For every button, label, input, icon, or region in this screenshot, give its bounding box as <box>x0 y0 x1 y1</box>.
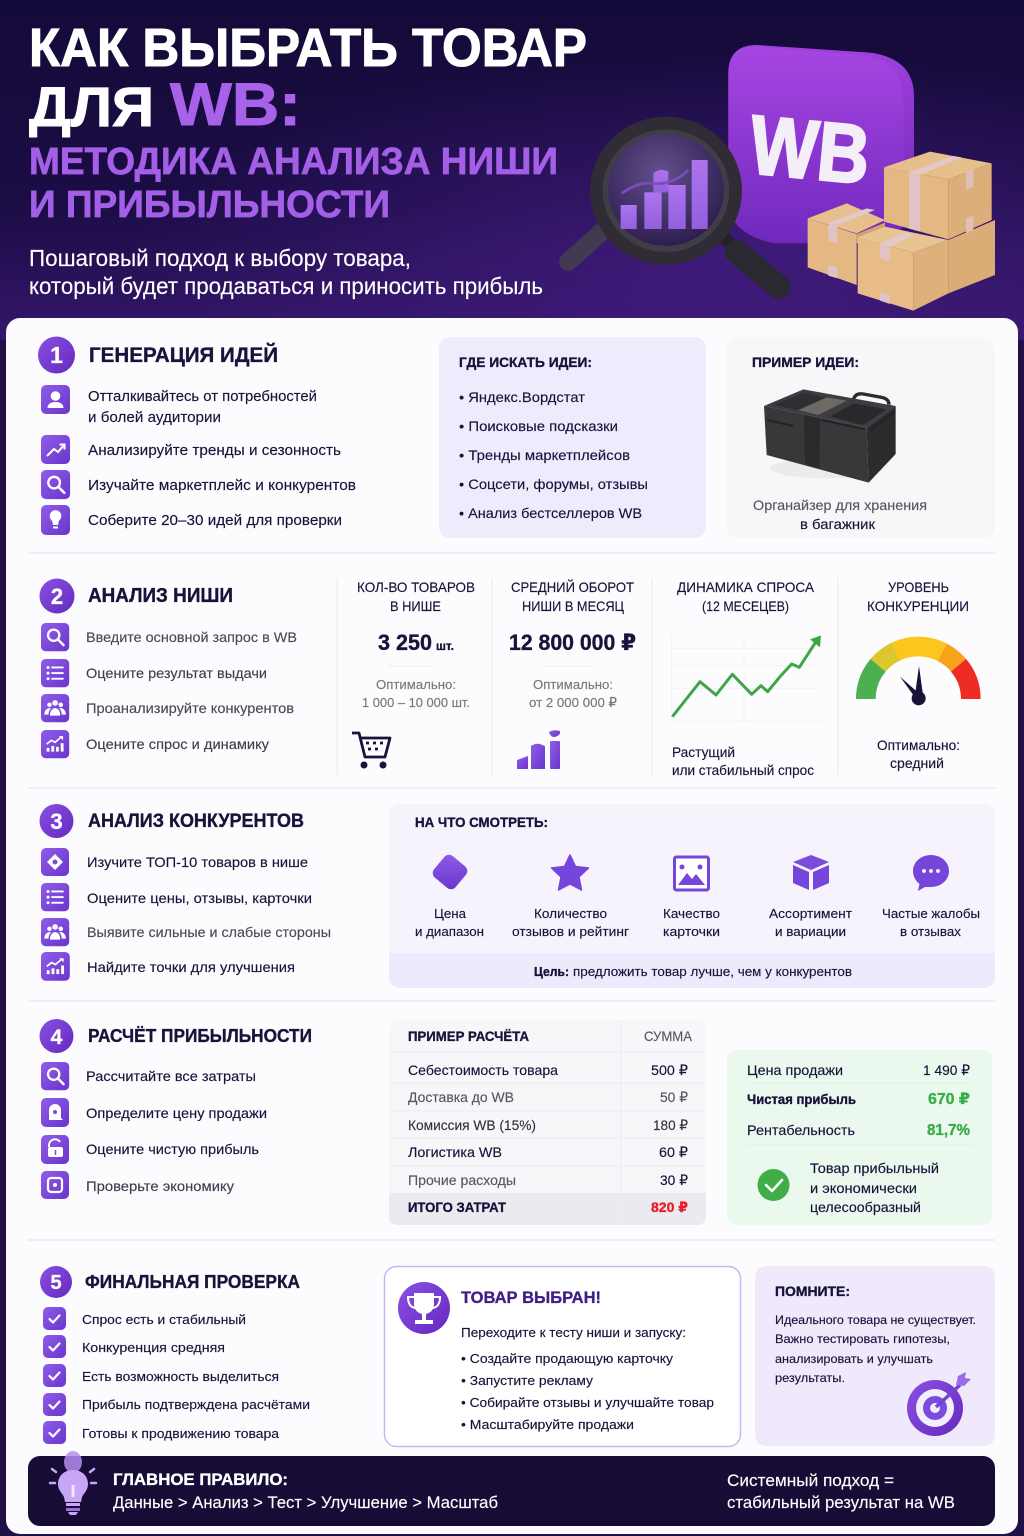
panel: where to look for ideas: ГДЕ ИСКАТЬ ИДЕИ: <box>459 354 592 370</box>
panel: where to look for ideas: • Яндекс.Вордстат <box>459 389 586 405</box>
subtitle: Пошаговый подход к выбору товара, <box>29 245 411 271</box>
chart: competition level gauge: Оптимально: <box>877 737 960 753</box>
panel: where to look for ideas: • Поисковые подсказки <box>459 418 618 434</box>
table: example calculation: Прочие расходы <box>408 1172 516 1188</box>
item: assortment: и вариации <box>775 924 846 939</box>
panel: idea example: Органайзер для хранения <box>753 497 927 513</box>
icon: green check <box>758 1169 790 1201</box>
metric: number of products: 1 000 – 10 000 шт. <box>362 695 470 710</box>
step: net profit <box>41 1135 259 1164</box>
metric: monthly turnover: СРЕДНИЙ ОБОРОТ <box>511 578 634 595</box>
section 3: competitor analysis <box>40 804 995 988</box>
step: evaluate results <box>41 659 267 687</box>
panel: profit summary: Товар прибыльный <box>810 1160 939 1176</box>
step: calculate costs <box>41 1062 256 1090</box>
step: evaluate results: Оцените результат выдачи <box>86 665 267 681</box>
step: top 10 products: Изучите ТОП-10 товаров в нише <box>87 854 308 870</box>
chart: demand dynamics over 12 months: (12 МЕСЕЦЕВ) <box>702 598 789 614</box>
step: collect ideas <box>41 505 342 535</box>
icon: shopping cart <box>352 733 390 768</box>
chart: demand dynamics over 12 months: Растущий <box>672 744 735 760</box>
check: differentiation: Есть возможность выделиться <box>82 1369 279 1384</box>
step: sale price: Определите цену продажи <box>86 1105 267 1121</box>
hero illustration: WB tile, magnifier and boxes <box>568 45 995 311</box>
heading: idea generation: ГЕНЕРАЦИЯ ИДЕЙ <box>89 343 278 367</box>
item: complaints <box>882 855 980 939</box>
panel: idea example: в багажник <box>800 516 876 532</box>
table: example calculation: Доставка до WB <box>408 1089 514 1105</box>
step: trends: Анализируйте тренды и сезонность <box>88 442 341 459</box>
heading: competitor analysis: АНАЛИЗ КОНКУРЕНТОВ <box>88 811 304 832</box>
number badge 4: 4 <box>51 1026 63 1049</box>
banner: main rule: Системный подход = <box>727 1471 894 1490</box>
panel: product selected: • Создайте продающую карточку <box>461 1351 674 1366</box>
item: complaints: Частые жалобы <box>882 906 980 921</box>
metric: monthly turnover <box>509 578 636 769</box>
metric: number of products <box>352 579 475 768</box>
icon: magnifier <box>568 117 778 287</box>
title <box>29 18 587 226</box>
step: top 10 products <box>41 848 308 876</box>
panel: remember: ПОМНИТЕ: <box>775 1283 850 1299</box>
section 5: final check <box>40 1266 995 1446</box>
item: assortment: Ассортимент <box>769 906 852 921</box>
section 1: idea generation <box>38 336 995 538</box>
step: audience needs: и болей аудитории <box>88 409 221 426</box>
number badge 3 <box>40 804 74 838</box>
chart: competition level gauge: средний <box>890 755 944 771</box>
check: differentiation <box>43 1364 279 1387</box>
panel: profit summary: Цена продажи <box>747 1062 843 1078</box>
panel: profit summary: целесообразный <box>810 1199 921 1215</box>
item: assortment <box>769 855 852 939</box>
icon: WB tile <box>728 45 914 243</box>
callout: goal: предложить товар лучше, чем у конкурентов <box>573 964 852 979</box>
section 4: profitability calculation <box>40 1019 992 1225</box>
step: audience needs: Отталкивайтесь от потребностей <box>88 388 317 405</box>
panel: remember: анализировать и улучшать <box>775 1352 933 1366</box>
check: profit: Прибыль подтверждена расчётами <box>82 1397 310 1412</box>
title: И ПРИБЫЛЬНОСТИ <box>29 184 390 226</box>
icon: WB tile: WB <box>746 98 874 202</box>
panel: where to look for ideas: • Анализ бестселлеров WB <box>459 505 642 521</box>
step: points of improvement: Найдите точки для улучшения <box>87 959 295 975</box>
item: card quality <box>663 857 720 939</box>
panel: profit summary: Рентабельность <box>747 1122 855 1138</box>
icon: growing bars <box>517 730 560 769</box>
check: competition: Конкуренция средняя <box>82 1340 225 1355</box>
chart: demand dynamics over 12 months: ДИНАМИКА СПРОСА <box>677 579 815 595</box>
item: reviews and rating: Количество <box>534 906 607 921</box>
step: points of improvement <box>41 952 295 981</box>
panel: profit summary: 670 ₽ <box>928 1091 970 1108</box>
heading: niche analysis: АНАЛИЗ НИШИ <box>88 585 233 607</box>
number badge 5 <box>40 1266 72 1298</box>
table: example calculation: 60 ₽ <box>659 1144 688 1160</box>
number badge 1 <box>38 336 75 374</box>
title: КАК ВЫБРАТЬ ТОВАР <box>29 18 587 78</box>
table: example calculation: Логистика WB <box>408 1144 502 1160</box>
chart: competition level gauge: УРОВЕНЬ <box>888 579 949 595</box>
panel: where to look for ideas <box>439 337 706 538</box>
banner: main rule: ГЛАВНОЕ ПРАВИЛО: <box>113 1470 288 1489</box>
panel: product selected: • Запустите рекламу <box>461 1373 594 1388</box>
panel: profit summary: Чистая прибыль <box>747 1091 856 1107</box>
metric: number of products: В НИШЕ <box>390 598 441 614</box>
table: example calculation: СУММА <box>644 1028 693 1044</box>
check: demand <box>43 1307 246 1330</box>
step: trends <box>41 435 341 464</box>
table: example calculation: 500 ₽ <box>651 1062 688 1078</box>
metric: monthly turnover: НИШИ В МЕСЯЦ <box>522 598 625 614</box>
chart: demand dynamics over 12 months <box>668 579 825 778</box>
step: net profit: Оцените чистую прибыль <box>86 1141 259 1157</box>
panel: profit summary: и экономически <box>810 1180 917 1196</box>
table: example calculation: 820 ₽ <box>651 1199 688 1215</box>
table: example calculation: ИТОГО ЗАТРАТ <box>408 1199 506 1215</box>
icon: cardboard boxes <box>808 152 995 311</box>
panel: remember: Важно тестировать гипотезы, <box>775 1332 950 1346</box>
item: card quality: Качество <box>663 906 720 921</box>
step: analyse competitors: Проанализируйте конкурентов <box>86 700 294 716</box>
step: demand dynamics <box>41 730 269 758</box>
step: strengths and weaknesses <box>41 918 331 946</box>
icon: light bulb <box>50 1451 96 1515</box>
chart: competition level gauge <box>856 579 981 771</box>
metric: monthly turnover: 12 800 000 ₽ <box>509 630 636 655</box>
panel: profit summary: 81,7% <box>927 1122 970 1139</box>
metric: number of products: шт. <box>436 639 454 653</box>
panel: what to look at <box>389 804 995 988</box>
step: prices, reviews, cards <box>41 883 312 911</box>
item: reviews and rating: отзывов и рейтинг <box>512 924 629 939</box>
step: strengths and weaknesses: Выявите сильные и слабые стороны <box>87 924 331 940</box>
icon: trunk organizer <box>764 389 896 483</box>
panel: idea example <box>727 337 995 538</box>
panel: what to look at: НА ЧТО СМОТРЕТЬ: <box>415 814 548 830</box>
panel: where to look for ideas: • Тренды маркетплейсов <box>459 447 630 463</box>
step: enter query <box>41 623 297 651</box>
chart: demand dynamics over 12 months: или стабильный спрос <box>672 762 814 778</box>
table: example calculation <box>389 1020 706 1225</box>
callout: goal: Цель: <box>534 964 569 979</box>
table: example calculation: 50 ₽ <box>660 1089 688 1105</box>
step: calculate costs: Рассчитайте все затраты <box>86 1068 256 1084</box>
metric: number of products: 3 250 <box>378 630 432 655</box>
check: promotion <box>43 1421 280 1444</box>
item: complaints: в отзывах <box>900 924 962 939</box>
banner: main rule: Данные > Анализ > Тест > Улучшение > Масштаб <box>113 1493 498 1512</box>
panel: remember: Идеального товара не существует. <box>775 1313 976 1327</box>
metric: monthly turnover: от 2 000 000 ₽ <box>529 695 617 710</box>
title: ДЛЯ <box>29 75 154 138</box>
item: price range: и диапазон <box>415 924 484 939</box>
panel: profit summary: 1 490 ₽ <box>923 1062 970 1078</box>
step: audience needs <box>41 385 317 426</box>
check: profit <box>43 1393 310 1416</box>
step: prices, reviews, cards: Оцените цены, отзывы, карточки <box>87 890 312 906</box>
item: price range <box>415 852 484 939</box>
icon: trophy <box>398 1282 450 1334</box>
table: example calculation: 180 ₽ <box>653 1117 688 1133</box>
icon: target with arrow <box>907 1372 971 1436</box>
number badge 5: 5 <box>50 1272 62 1294</box>
table: example calculation: ПРИМЕР РАСЧЁТА <box>408 1028 529 1044</box>
number badge 2 <box>40 578 74 614</box>
metric: number of products: Оптимально: <box>376 677 456 692</box>
item: card quality: карточки <box>663 924 720 939</box>
step: demand dynamics: Оцените спрос и динамику <box>86 736 269 752</box>
check: demand: Спрос есть и стабильный <box>82 1312 246 1327</box>
panel: where to look for ideas: • Соцсети, форумы, отзывы <box>459 476 648 492</box>
step: marketplace research: Изучайте маркетплейс и конкурентов <box>88 477 356 494</box>
item: price range: Цена <box>434 906 467 921</box>
title: МЕТОДИКА АНАЛИЗА НИШИ <box>29 141 558 183</box>
chart: competition level gauge: КОНКУРЕНЦИИ <box>867 598 969 614</box>
step: check economics <box>41 1171 234 1199</box>
check: promotion: Готовы к продвижению товара <box>82 1426 280 1441</box>
panel: product selected <box>384 1266 740 1446</box>
panel: product selected: • Масштабируйте продажи <box>461 1417 634 1432</box>
check: competition <box>43 1335 225 1358</box>
subtitle <box>29 245 543 299</box>
panel: idea example: ПРИМЕР ИДЕИ: <box>752 354 859 370</box>
title: WB: <box>170 71 301 138</box>
panel: remember <box>755 1266 995 1446</box>
heading: final check: ФИНАЛЬНАЯ ПРОВЕРКА <box>85 1272 300 1292</box>
metric: monthly turnover: Оптимально: <box>533 677 613 692</box>
main white card <box>6 318 1018 1534</box>
number badge 3: 3 <box>50 809 63 834</box>
panel: profit summary <box>727 1050 992 1225</box>
number badge 1: 1 <box>50 342 63 368</box>
heading: profitability calculation: РАСЧЁТ ПРИБЫЛЬНОСТИ <box>88 1026 312 1046</box>
panel: product selected: • Собирайте отзывы и улучшайте товар <box>461 1395 714 1410</box>
table: example calculation: Комиссия WB (15%) <box>408 1117 536 1133</box>
panel: remember: результаты. <box>775 1371 845 1385</box>
panel: product selected: ТОВАР ВЫБРАН! <box>461 1288 601 1307</box>
step: collect ideas: Соберите 20–30 идей для проверки <box>88 512 342 529</box>
table: example calculation: Себестоимость товара <box>408 1062 558 1078</box>
subtitle: который будет продаваться и приносить прибыль <box>29 273 543 299</box>
step: check economics: Проверьте экономику <box>86 1178 234 1194</box>
step: marketplace research <box>41 470 356 499</box>
section 2: niche analysis <box>40 578 981 778</box>
banner: main rule: стабильный результат на WB <box>727 1493 955 1512</box>
panel: product selected: Переходите к тесту ниши и запуску: <box>461 1325 686 1340</box>
number badge 4 <box>40 1019 74 1053</box>
step: analyse competitors <box>41 694 294 722</box>
step: sale price <box>41 1098 267 1127</box>
metric: number of products: КОЛ-ВО ТОВАРОВ <box>357 579 475 595</box>
banner: main rule <box>28 1451 995 1526</box>
item: reviews and rating <box>512 855 629 939</box>
number badge 2: 2 <box>51 584 63 609</box>
step: enter query: Введите основной запрос в WB <box>86 629 297 645</box>
table: example calculation: 30 ₽ <box>660 1172 688 1188</box>
